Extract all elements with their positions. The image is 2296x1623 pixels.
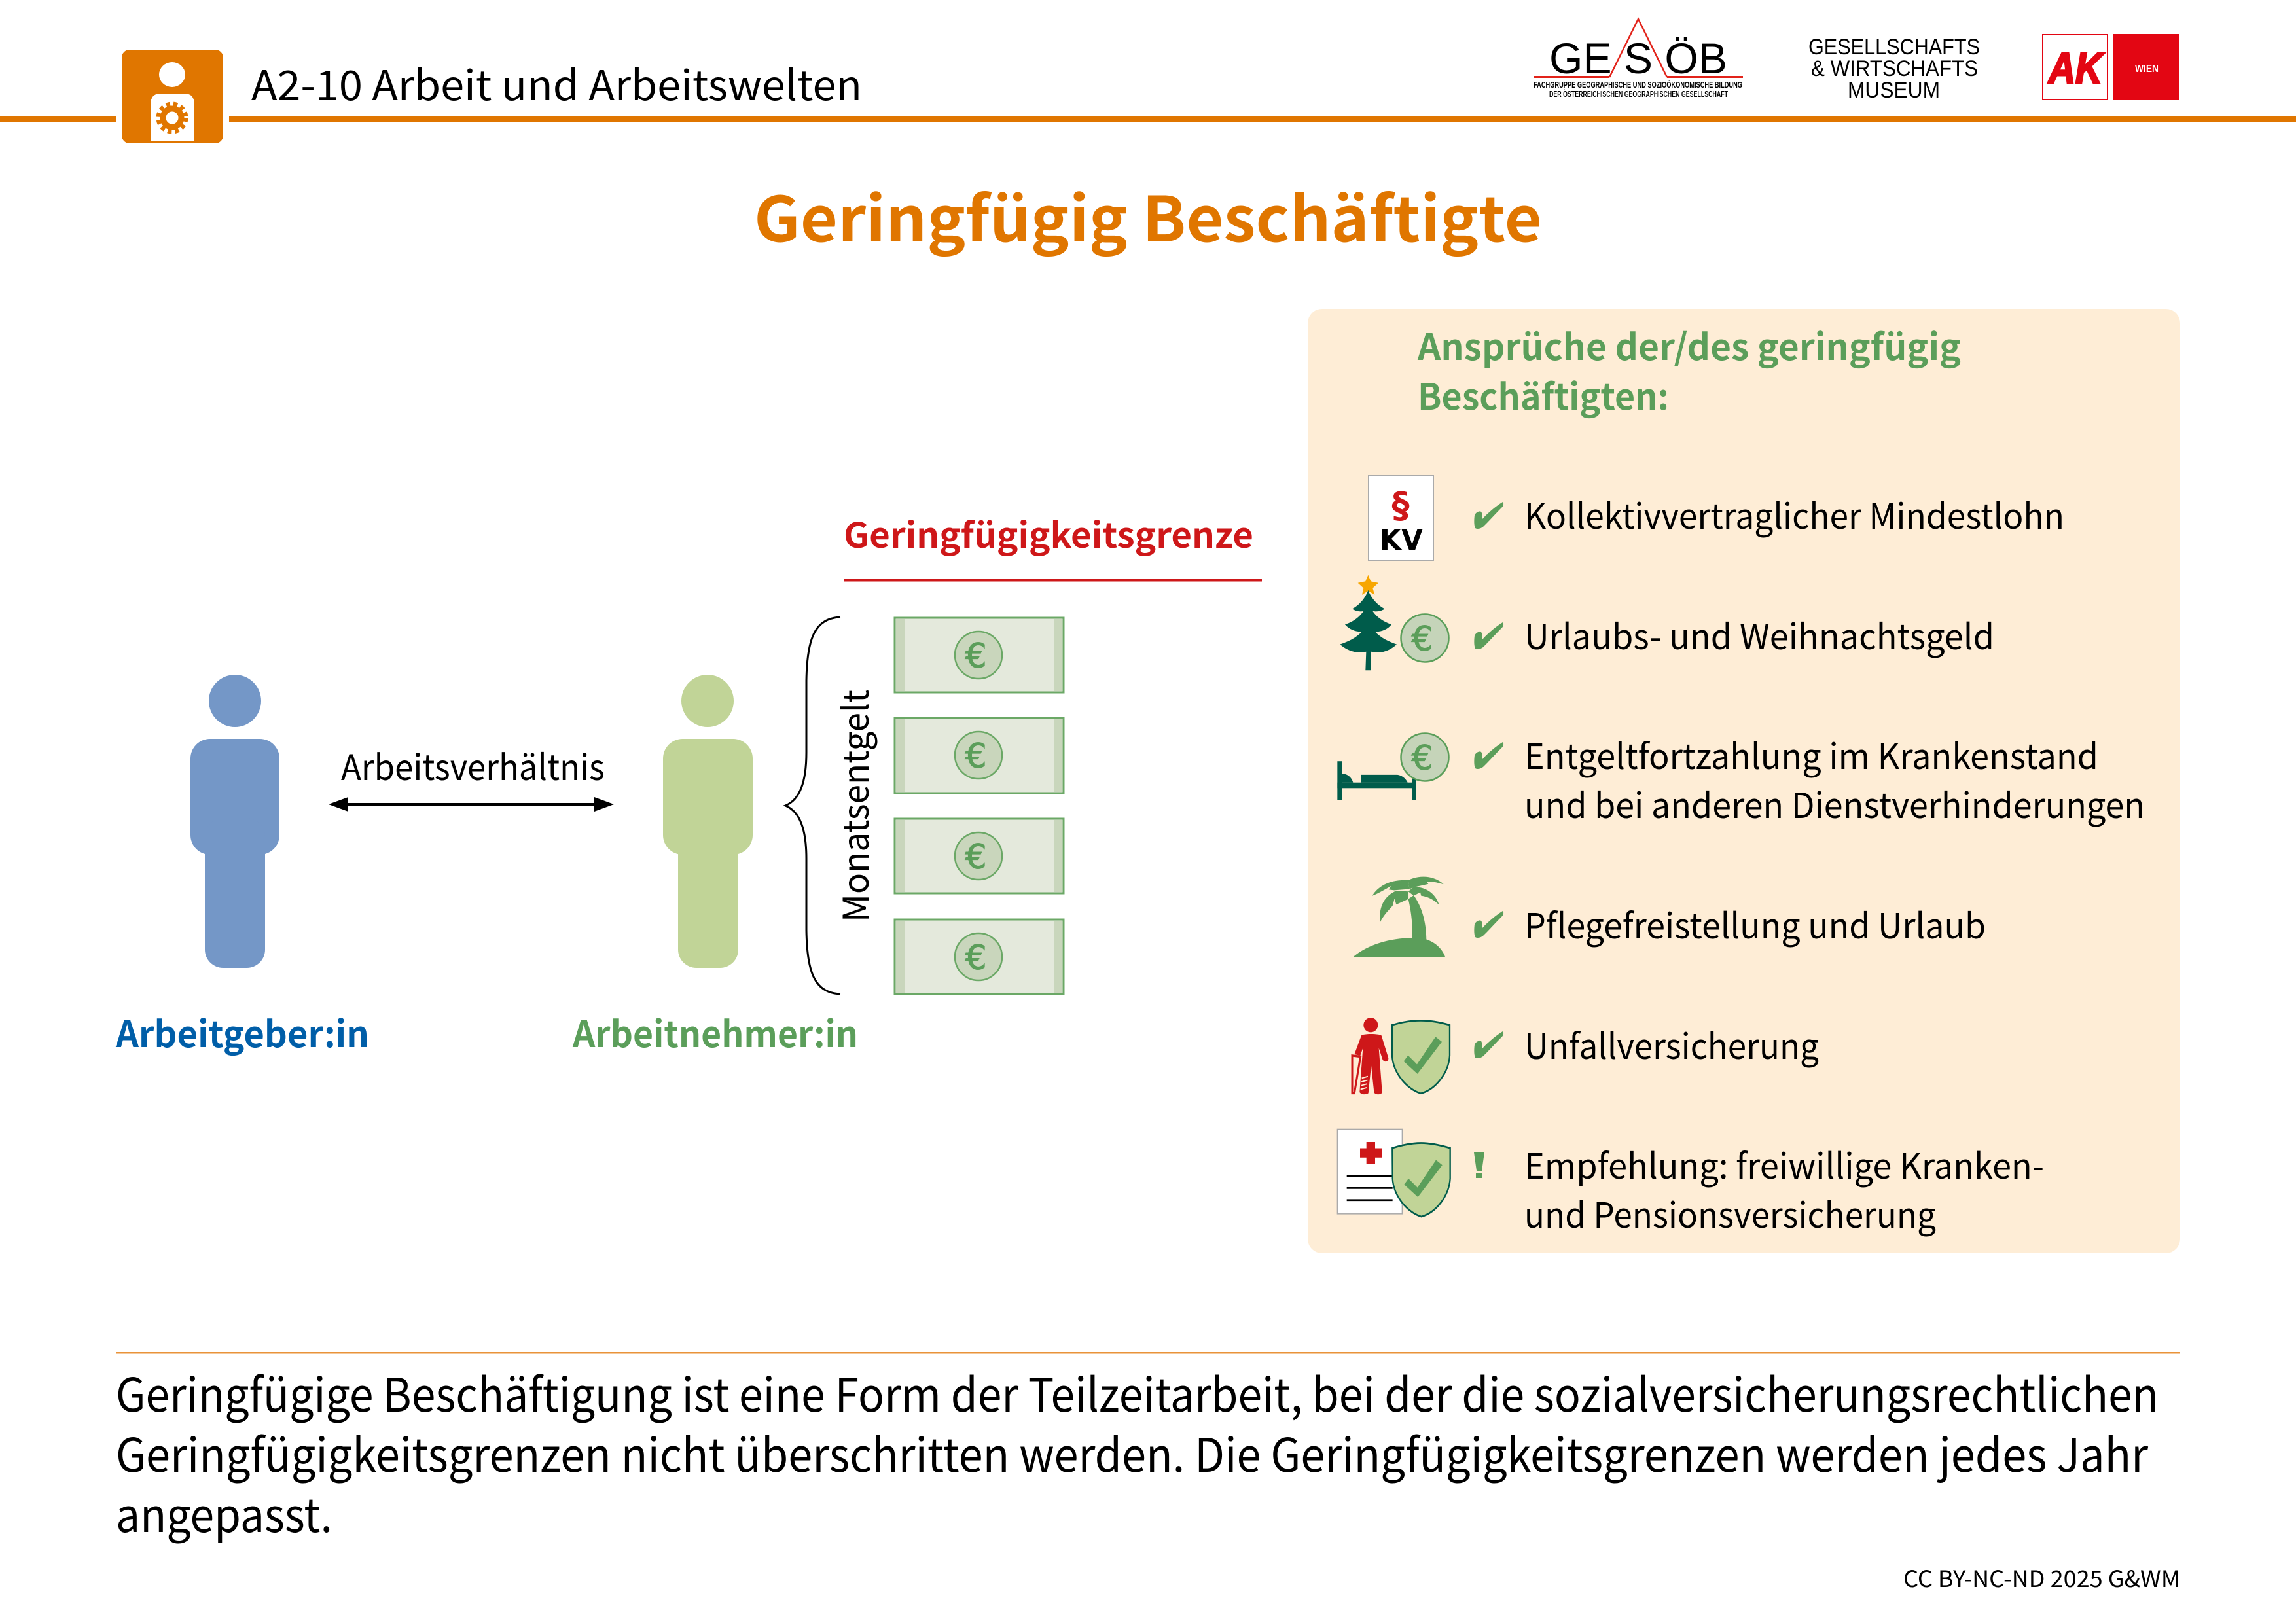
icon: Christmas tree with coin: €	[1411, 620, 1433, 659]
description text: Geringfügige Beschäftigung ist eine Form der Teilzeitarbeit, bei der die sozialversicherungsrechtlichen	[116, 1359, 2159, 1425]
item: Urlaubs- und Weihnachtsgeld: Urlaubs- und Weihnachtsgeld	[1524, 610, 1994, 660]
banknote 3: €	[965, 838, 987, 877]
icon: paragraph KV document	[1369, 476, 1433, 560]
banknote 4	[895, 919, 1064, 994]
logo: AK Wien: WIEN	[2135, 63, 2159, 75]
brace	[785, 617, 840, 994]
description text	[116, 1359, 2159, 1546]
item: Entgeltfortzahlung	[1474, 730, 2145, 829]
label: Arbeitgeber: Arbeitgeber:in	[115, 1005, 369, 1058]
logo: GESÖB: DER ÖSTERREICHISCHEN GEOGRAPHISCHEN GESELLSCHAFT	[1549, 89, 1728, 99]
icon: paragraph KV document: KV	[1380, 524, 1423, 557]
panel heading	[1417, 318, 1961, 420]
header title: A2-10 Arbeit und Arbeitswelten	[251, 53, 862, 113]
icon: bed with coin	[1337, 733, 1449, 800]
logo: AK Wien	[2043, 34, 2179, 100]
item: Empfehlung	[1474, 1139, 2044, 1238]
item: Unfallversicherung: Unfallversicherung	[1524, 1020, 1819, 1069]
logo: AK Wien: AK	[2047, 44, 2105, 93]
label: Arbeitnehmer: Arbeitnehmer:in	[572, 1005, 858, 1058]
bottom rule	[116, 1352, 2180, 1353]
item: Entgeltfortzahlung: und bei anderen Dienstverhinderungen	[1524, 779, 2145, 829]
icon: paragraph KV document: §	[1391, 485, 1410, 526]
item: Empfehlung: und Pensionsversicherung	[1524, 1188, 1936, 1238]
icon: injured person with shield	[1352, 1018, 1450, 1094]
icon: insurance document with shield	[1337, 1129, 1450, 1217]
banknote 3	[895, 819, 1064, 893]
icon: Christmas tree with coin	[1340, 575, 1449, 670]
banknote 4: €	[965, 938, 987, 978]
arrow: Arbeitsverhältnis: Arbeitsverhältnis	[341, 739, 605, 791]
banknote 1	[895, 618, 1064, 692]
item: Kollektivvertraglicher Mindestlohn: Kollektivvertraglicher Mindestlohn	[1524, 490, 2064, 539]
icon: bed with coin: €	[1411, 739, 1433, 778]
heading: Geringfügigkeitsgrenze: Geringfügigkeitsgrenze	[844, 508, 1253, 558]
heading: Geringfügigkeitsgrenze	[844, 508, 1262, 581]
panel heading: Beschäftigten:	[1418, 368, 1669, 420]
icon: worker with gear	[122, 50, 223, 143]
icon: palm island	[1353, 877, 1445, 957]
label: Monatsentgelt: Monatsentgelt	[827, 690, 879, 922]
logo: Gesellschafts- und Wirtschaftsmuseum: GESELLSCHAFTS	[1808, 35, 1980, 60]
panel: Ansprüche	[1308, 309, 2180, 1253]
item: Entgeltfortzahlung: Entgeltfortzahlung im Krankenstand	[1524, 730, 2098, 779]
logo: GESÖB: FACHGRUPPE GEOGRAPHISCHE UND SOZIOÖKONOMISCHE BILDUNG	[1534, 80, 1742, 90]
logo: Gesellschafts- und Wirtschaftsmuseum	[1808, 35, 1980, 103]
banknote 2	[895, 718, 1064, 793]
item: Pflegefreistellung: Pflegefreistellung und Urlaub	[1524, 899, 1986, 949]
banknote 1: €	[965, 637, 987, 676]
description text: Geringfügigkeitsgrenzen nicht überschritten werden. Die Geringfügigkeitsgrenzen werden jedes Jahr	[116, 1419, 2148, 1486]
banknote 2: €	[965, 737, 987, 776]
header rule	[0, 116, 2296, 122]
arrow: Arbeitsverhältnis	[329, 739, 614, 812]
person: Arbeitgeber	[190, 675, 279, 968]
person: Arbeitnehmer	[663, 675, 753, 968]
item: Empfehlung: Empfehlung: freiwillige Kranken-	[1524, 1139, 2044, 1189]
title: Geringfügig Beschäftigte	[754, 170, 1542, 260]
logo: Gesellschafts- und Wirtschaftsmuseum: MUSEUM	[1848, 78, 1940, 103]
logo: Gesellschafts- und Wirtschaftsmuseum: & WIRTSCHAFTS	[1811, 56, 1978, 81]
logo: GESÖB	[1534, 19, 1743, 99]
credit: CC BY-NC-ND 2025 G&WM	[1903, 1561, 2180, 1594]
logo: GESÖB: GE S ÖB	[1549, 34, 1727, 82]
description text: angepasst.	[116, 1479, 332, 1546]
panel heading: Ansprüche der/des geringfügig	[1417, 318, 1961, 370]
